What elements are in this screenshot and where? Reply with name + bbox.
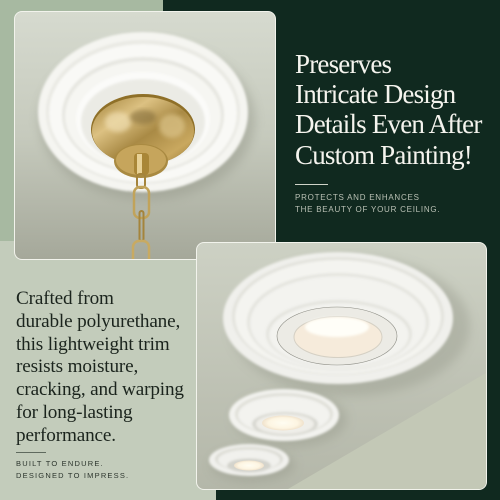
icon: brass chain [133, 174, 149, 271]
icon: small medallion [209, 444, 289, 476]
heading: preserves design: Custom Painting! [295, 140, 472, 170]
divider: description rule [16, 452, 46, 453]
icon: brass canopy [91, 94, 195, 178]
text block: crafted description [16, 288, 184, 446]
text block: built caption: DESIGNED TO IMPRESS. [16, 471, 129, 480]
text block: crafted description: durable polyurethane, [16, 311, 180, 332]
text block: crafted description: cracking, and warping [16, 379, 184, 400]
text block: built caption: BUILT TO ENDURE. [16, 459, 104, 468]
text block: crafted description: resists moisture, [16, 356, 138, 377]
text block: built caption [16, 459, 129, 480]
text block: protects caption: THE BEAUTY OF YOUR CEILING. [295, 205, 440, 214]
text block: crafted description: for long-lasting [16, 402, 132, 423]
text block: crafted description: Crafted from [16, 288, 114, 309]
text block: protects caption [295, 193, 440, 214]
panel: bottom-left sage background [0, 241, 216, 500]
icon: medium medallion [229, 389, 339, 441]
heading: preserves design [295, 48, 482, 170]
divider: heading rule [295, 184, 328, 185]
icon: large medallion [223, 252, 453, 384]
text block: crafted description: this lightweight trim [16, 334, 170, 355]
heading: preserves design: Intricate Design [295, 79, 455, 109]
panel: top-left sage background [0, 0, 163, 242]
wall plane [288, 405, 486, 489]
text block: crafted description: performance. [16, 425, 116, 446]
heading: preserves design: Preserves [295, 48, 391, 78]
icon: ceiling medallion [38, 32, 248, 192]
text block: protects caption: PROTECTS AND ENHANCES [295, 193, 420, 202]
panel: chandelier medallion photo [14, 11, 276, 271]
panel: recessed light medallions photo [196, 242, 487, 490]
heading: preserves design: Details Even After [295, 109, 482, 139]
